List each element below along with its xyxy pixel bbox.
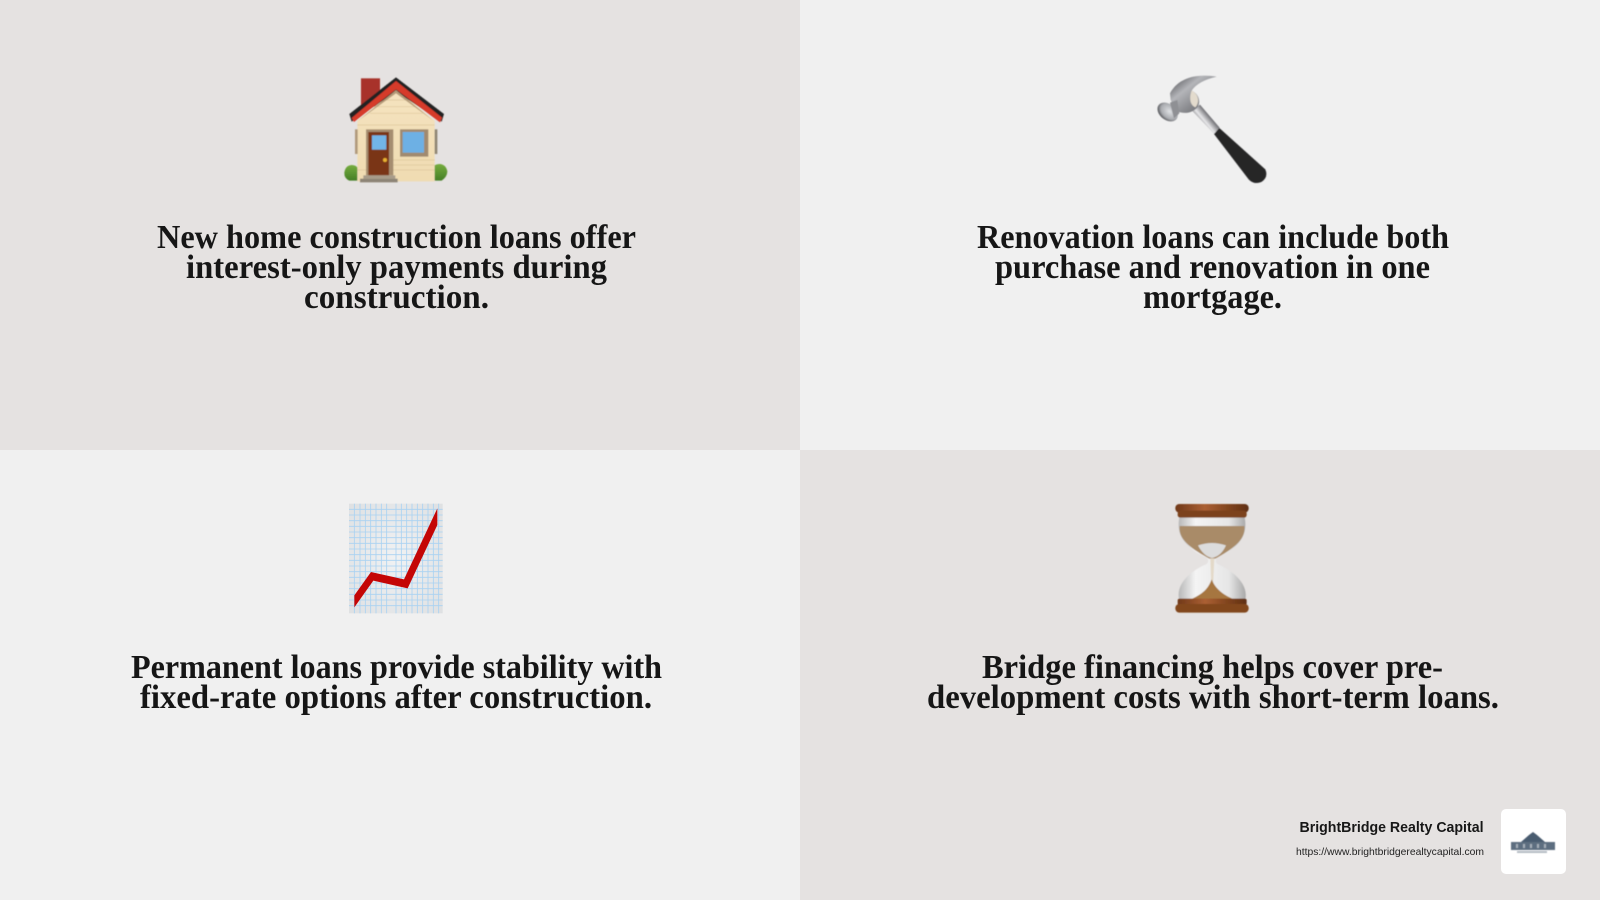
heading: permanent: fixed-rate options after construction. bbox=[140, 679, 652, 716]
heading: bridge financing: Bridge financing helps cover pre- bbox=[982, 649, 1443, 686]
heading: new home construction: New home construction loans offer bbox=[157, 219, 636, 256]
heading: new home construction: interest-only payments during bbox=[186, 249, 607, 286]
heading: bridge financing: development costs with short-term loans. bbox=[927, 679, 1499, 716]
logo bbox=[1501, 809, 1566, 874]
brand name: BrightBridge Realty Capital bbox=[1300, 820, 1484, 836]
heading: permanent bbox=[131, 649, 662, 716]
panel: renovation loans bbox=[800, 0, 1600, 450]
heading: renovation: mortgage. bbox=[1143, 279, 1282, 316]
heading: renovation: Renovation loans can include both bbox=[977, 219, 1449, 256]
website url: https://www.brightbridgerealtycapital.com bbox=[1296, 846, 1484, 858]
icon: hourglass bbox=[1175, 504, 1249, 613]
heading: renovation bbox=[977, 219, 1449, 316]
heading: new home construction bbox=[157, 219, 636, 316]
heading: renovation: purchase and renovation in one bbox=[995, 249, 1430, 286]
panel: permanent loans bbox=[0, 450, 800, 900]
panel: bridge financing bbox=[800, 450, 1600, 900]
icon: house bbox=[344, 77, 447, 182]
panel: new home construction loans bbox=[0, 0, 800, 450]
heading: permanent: Permanent loans provide stability with bbox=[131, 649, 662, 686]
icon: rising chart bbox=[349, 504, 443, 613]
brand footer bbox=[1296, 809, 1566, 874]
icon: hammer bbox=[1154, 76, 1266, 183]
heading: bridge financing bbox=[927, 649, 1499, 716]
heading: new home construction: construction. bbox=[304, 279, 489, 316]
